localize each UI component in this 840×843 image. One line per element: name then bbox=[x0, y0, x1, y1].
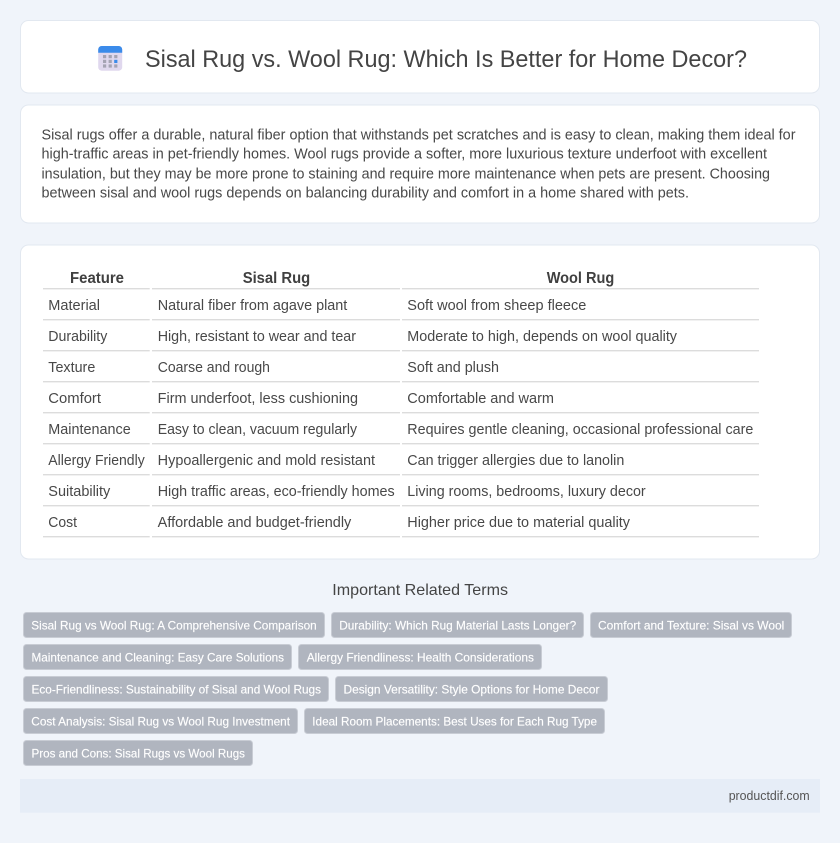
table row: suitability: Suitability bbox=[48, 484, 111, 500]
table row: durability: High, resistant to wear and tear bbox=[158, 329, 356, 345]
panel: introduction paragraph bbox=[20, 105, 820, 223]
table row: texture: Soft and plush bbox=[407, 360, 499, 376]
tag: Cost Analysis: Sisal Rug vs Wool Rug Investment bbox=[31, 714, 291, 728]
table row: material: Soft wool from sheep fleece bbox=[407, 298, 586, 314]
table row: comfort: Firm underfoot, less cushioning bbox=[158, 391, 358, 407]
table header row: Sisal Rug bbox=[243, 270, 310, 287]
tag: Pros and Cons: Sisal Rugs vs Wool Rugs bbox=[32, 746, 245, 760]
tag: Design Versatility: Style Options for Home Decor bbox=[344, 682, 600, 696]
tag: Allergy Friendliness: Health Considerations bbox=[307, 650, 534, 664]
table row: cost bbox=[48, 515, 631, 531]
table row: maintenance: Easy to clean, vacuum regularly bbox=[158, 422, 358, 438]
table row: comfort bbox=[48, 391, 554, 407]
table row: cost: Higher price due to material quality bbox=[407, 515, 631, 531]
table row: maintenance: Maintenance bbox=[48, 422, 131, 438]
table row: suitability bbox=[48, 484, 646, 500]
tag: Eco-Friendliness: Sustainability of Sisal and Wool Rugs bbox=[32, 682, 321, 696]
footer bar bbox=[20, 779, 820, 813]
table row: material: Natural fiber from agave plant bbox=[158, 298, 347, 314]
tag: Comfort and Texture: Sisal vs Wool bbox=[598, 618, 784, 632]
tag: Maintenance and Cleaning: Easy Care Solutions bbox=[32, 650, 284, 664]
table row: allergy friendly: Can trigger allergies due to lanolin bbox=[407, 453, 624, 469]
text block: introduction: high-traffic areas in pet-friendly homes. Wool rugs provide a softer, more luxurious texture underfoot with excellent bbox=[42, 147, 767, 163]
footer text: source: productdif.com bbox=[729, 788, 810, 803]
tag bbox=[298, 644, 542, 670]
tag bbox=[332, 612, 584, 638]
tag bbox=[24, 644, 292, 670]
tag bbox=[24, 740, 252, 766]
table row: durability bbox=[48, 329, 678, 345]
tag: Durability: Which Rug Material Lasts Longer? bbox=[339, 618, 577, 632]
table row: durability: Moderate to high, depends on wool quality bbox=[407, 329, 678, 345]
related term tags bbox=[24, 612, 792, 766]
table row: material: Material bbox=[48, 298, 100, 314]
tag bbox=[24, 676, 328, 702]
table header row bbox=[70, 270, 614, 287]
table row: maintenance bbox=[48, 422, 753, 438]
table row: texture: Coarse and rough bbox=[158, 360, 270, 376]
table row: allergy friendly: Hypoallergenic and mold resistant bbox=[158, 453, 375, 469]
table row: texture bbox=[48, 360, 499, 376]
table row: durability: Durability bbox=[48, 329, 108, 345]
tag bbox=[590, 612, 792, 638]
table row: allergy friendly bbox=[48, 453, 624, 469]
tag: Ideal Room Placements: Best Uses for Each Rug Type bbox=[312, 714, 597, 728]
tag bbox=[336, 676, 608, 702]
tag: Sisal Rug vs Wool Rug: A Comprehensive Comparison bbox=[31, 618, 317, 632]
table row: comfort: Comfortable and warm bbox=[407, 391, 554, 407]
table row: cost: Affordable and budget-friendly bbox=[158, 515, 352, 531]
text block: introduction: insulation, but they may be more prone to staining and require more maintenance when pets are present. Choosing bbox=[42, 166, 770, 182]
table header row: Wool Rug bbox=[547, 270, 614, 287]
text block: introduction bbox=[42, 127, 796, 202]
table row: allergy friendly: Allergy Friendly bbox=[48, 453, 145, 469]
tag bbox=[24, 708, 298, 734]
text block: introduction: between sisal and wool rugs depends on balancing durability and comfort in a home shared with pets. bbox=[42, 186, 689, 202]
table row: suitability: Living rooms, bedrooms, luxury decor bbox=[407, 484, 646, 500]
title: Sisal Rug vs. Wool Rug: Which Is Better for Home Decor? bbox=[145, 46, 747, 73]
table header row: Feature bbox=[70, 270, 124, 287]
heading: important related terms: Important Related Terms bbox=[332, 582, 508, 599]
header panel bbox=[20, 20, 820, 93]
table row: cost: Cost bbox=[48, 515, 77, 531]
table row: material bbox=[48, 298, 586, 314]
table row: texture: Texture bbox=[48, 360, 95, 376]
table row: suitability: High traffic areas, eco-friendly homes bbox=[158, 484, 395, 500]
table row: maintenance: Requires gentle cleaning, occasional professional care bbox=[407, 422, 753, 438]
text block: introduction: Sisal rugs offer a durable, natural fiber option that withstands pet scratches and is easy to clean, making them ideal for bbox=[42, 127, 796, 143]
tag bbox=[304, 708, 604, 734]
panel: comparison table bbox=[20, 245, 820, 559]
icon: calendar grid bbox=[98, 46, 122, 71]
tag bbox=[24, 612, 324, 638]
table row: comfort: Comfort bbox=[48, 391, 101, 407]
